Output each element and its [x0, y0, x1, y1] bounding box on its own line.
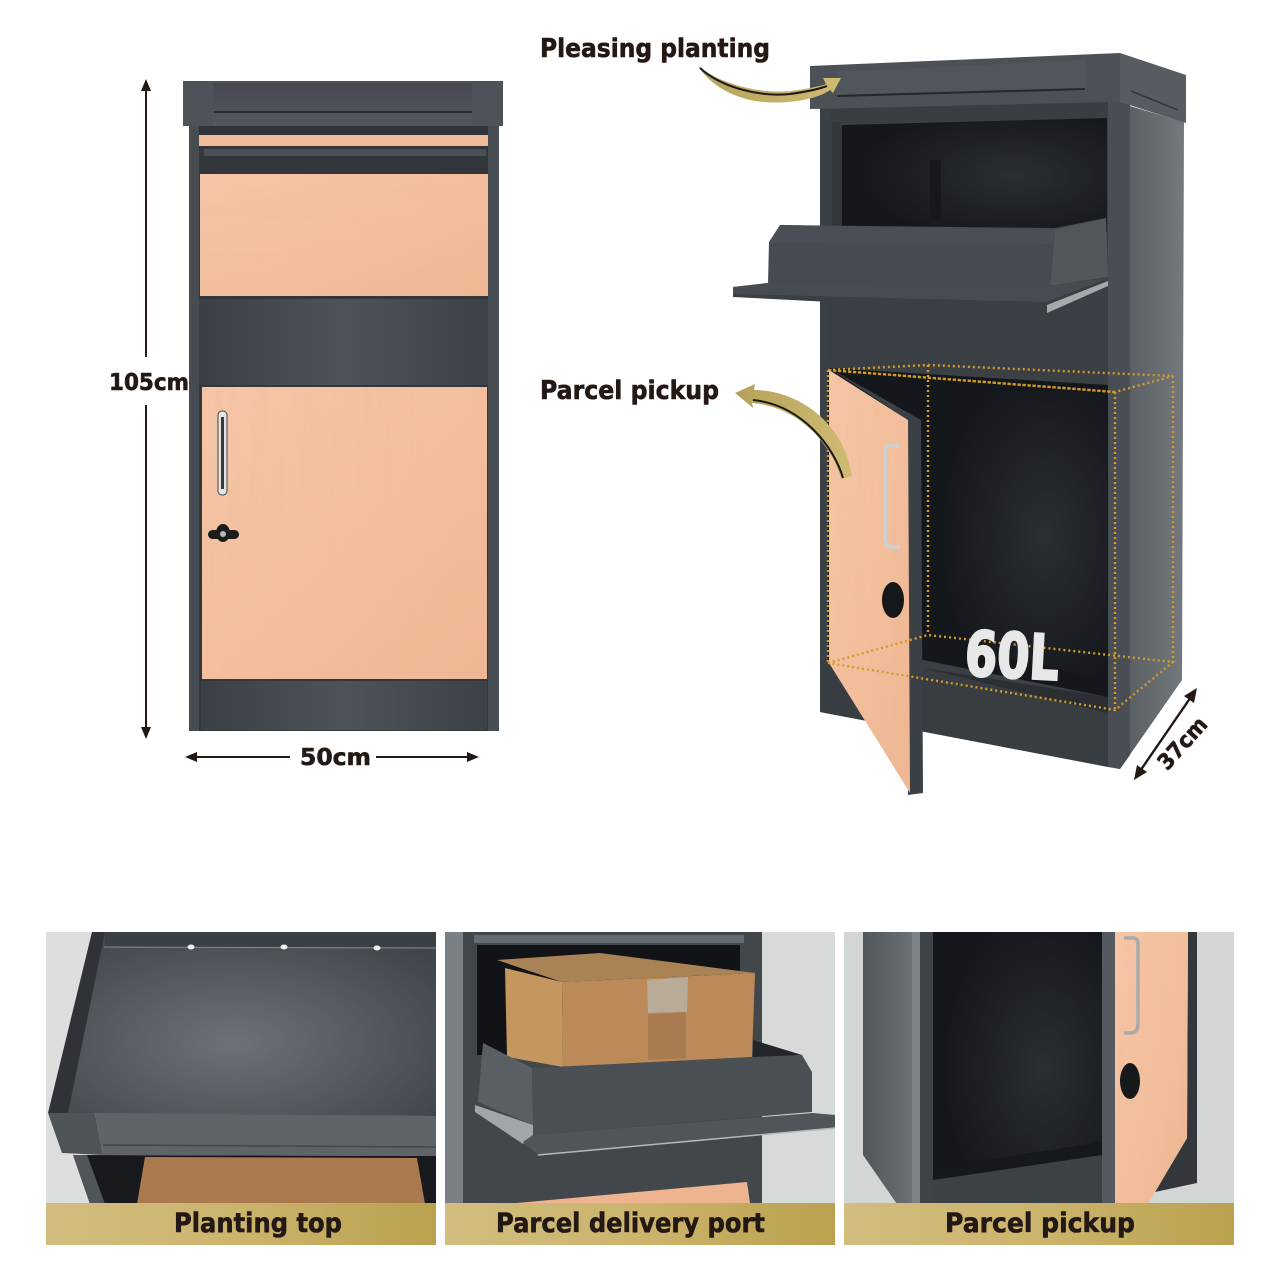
open door — [829, 368, 923, 795]
callout: parcel pickup — [540, 376, 852, 479]
arrow — [698, 66, 841, 103]
cardboard box — [497, 953, 755, 1067]
door lock — [882, 582, 904, 618]
interior below tray — [73, 1155, 436, 1204]
door lock — [1120, 1063, 1140, 1099]
wood door — [202, 387, 487, 679]
dimension: depth 37cm — [1134, 688, 1213, 780]
door lock — [208, 524, 239, 542]
middle panel — [199, 299, 488, 385]
caption bar: Parcel delivery port — [496, 1208, 765, 1239]
dotted volume outline — [828, 365, 1173, 710]
wood strip — [199, 135, 488, 146]
panel: parcel delivery port — [445, 932, 835, 1245]
mail tray — [733, 218, 1108, 313]
caption bar — [844, 1203, 1234, 1245]
door handle — [885, 446, 900, 547]
dimension: width 50cm: 50cm — [300, 745, 371, 771]
dimension: depth 37cm: 37cm — [1153, 713, 1213, 775]
dimension: width 50cm — [185, 745, 479, 771]
open door — [1115, 932, 1188, 1204]
caption bar: Planting top — [174, 1208, 342, 1239]
front frame — [820, 100, 1120, 769]
door handle — [1124, 938, 1138, 1033]
callout: parcel pickup: Parcel pickup — [540, 376, 719, 406]
roof — [810, 53, 1186, 124]
panel: planting top — [46, 932, 436, 1245]
label: 60L: 60L — [963, 617, 1061, 695]
arrow — [735, 384, 852, 479]
wood drawer — [200, 174, 488, 296]
upper interior — [842, 118, 1107, 232]
cardboard box — [137, 1157, 425, 1204]
roof — [183, 81, 503, 135]
lower panel — [475, 1112, 752, 1203]
lower interior — [828, 368, 1108, 697]
panel below tray — [828, 288, 1108, 367]
caption bar — [46, 1203, 436, 1245]
tray — [48, 932, 436, 1156]
side panel — [1120, 103, 1184, 769]
caption bar — [445, 1203, 835, 1245]
panel: parcel pickup — [844, 932, 1234, 1245]
front view of parcel box — [183, 81, 503, 731]
base — [820, 660, 1108, 767]
base — [201, 681, 487, 730]
wood door — [517, 1182, 750, 1203]
door handle — [218, 411, 227, 495]
callout: pleasing planting: Pleasing planting — [540, 34, 770, 64]
dimension: height 105cm: 105cm — [109, 370, 189, 396]
tray — [475, 1040, 835, 1155]
dimension: height 105cm — [109, 79, 189, 739]
open parcel box, angled view — [733, 53, 1186, 795]
caption bar: Parcel pickup — [945, 1208, 1135, 1239]
callout: pleasing planting — [540, 34, 841, 103]
